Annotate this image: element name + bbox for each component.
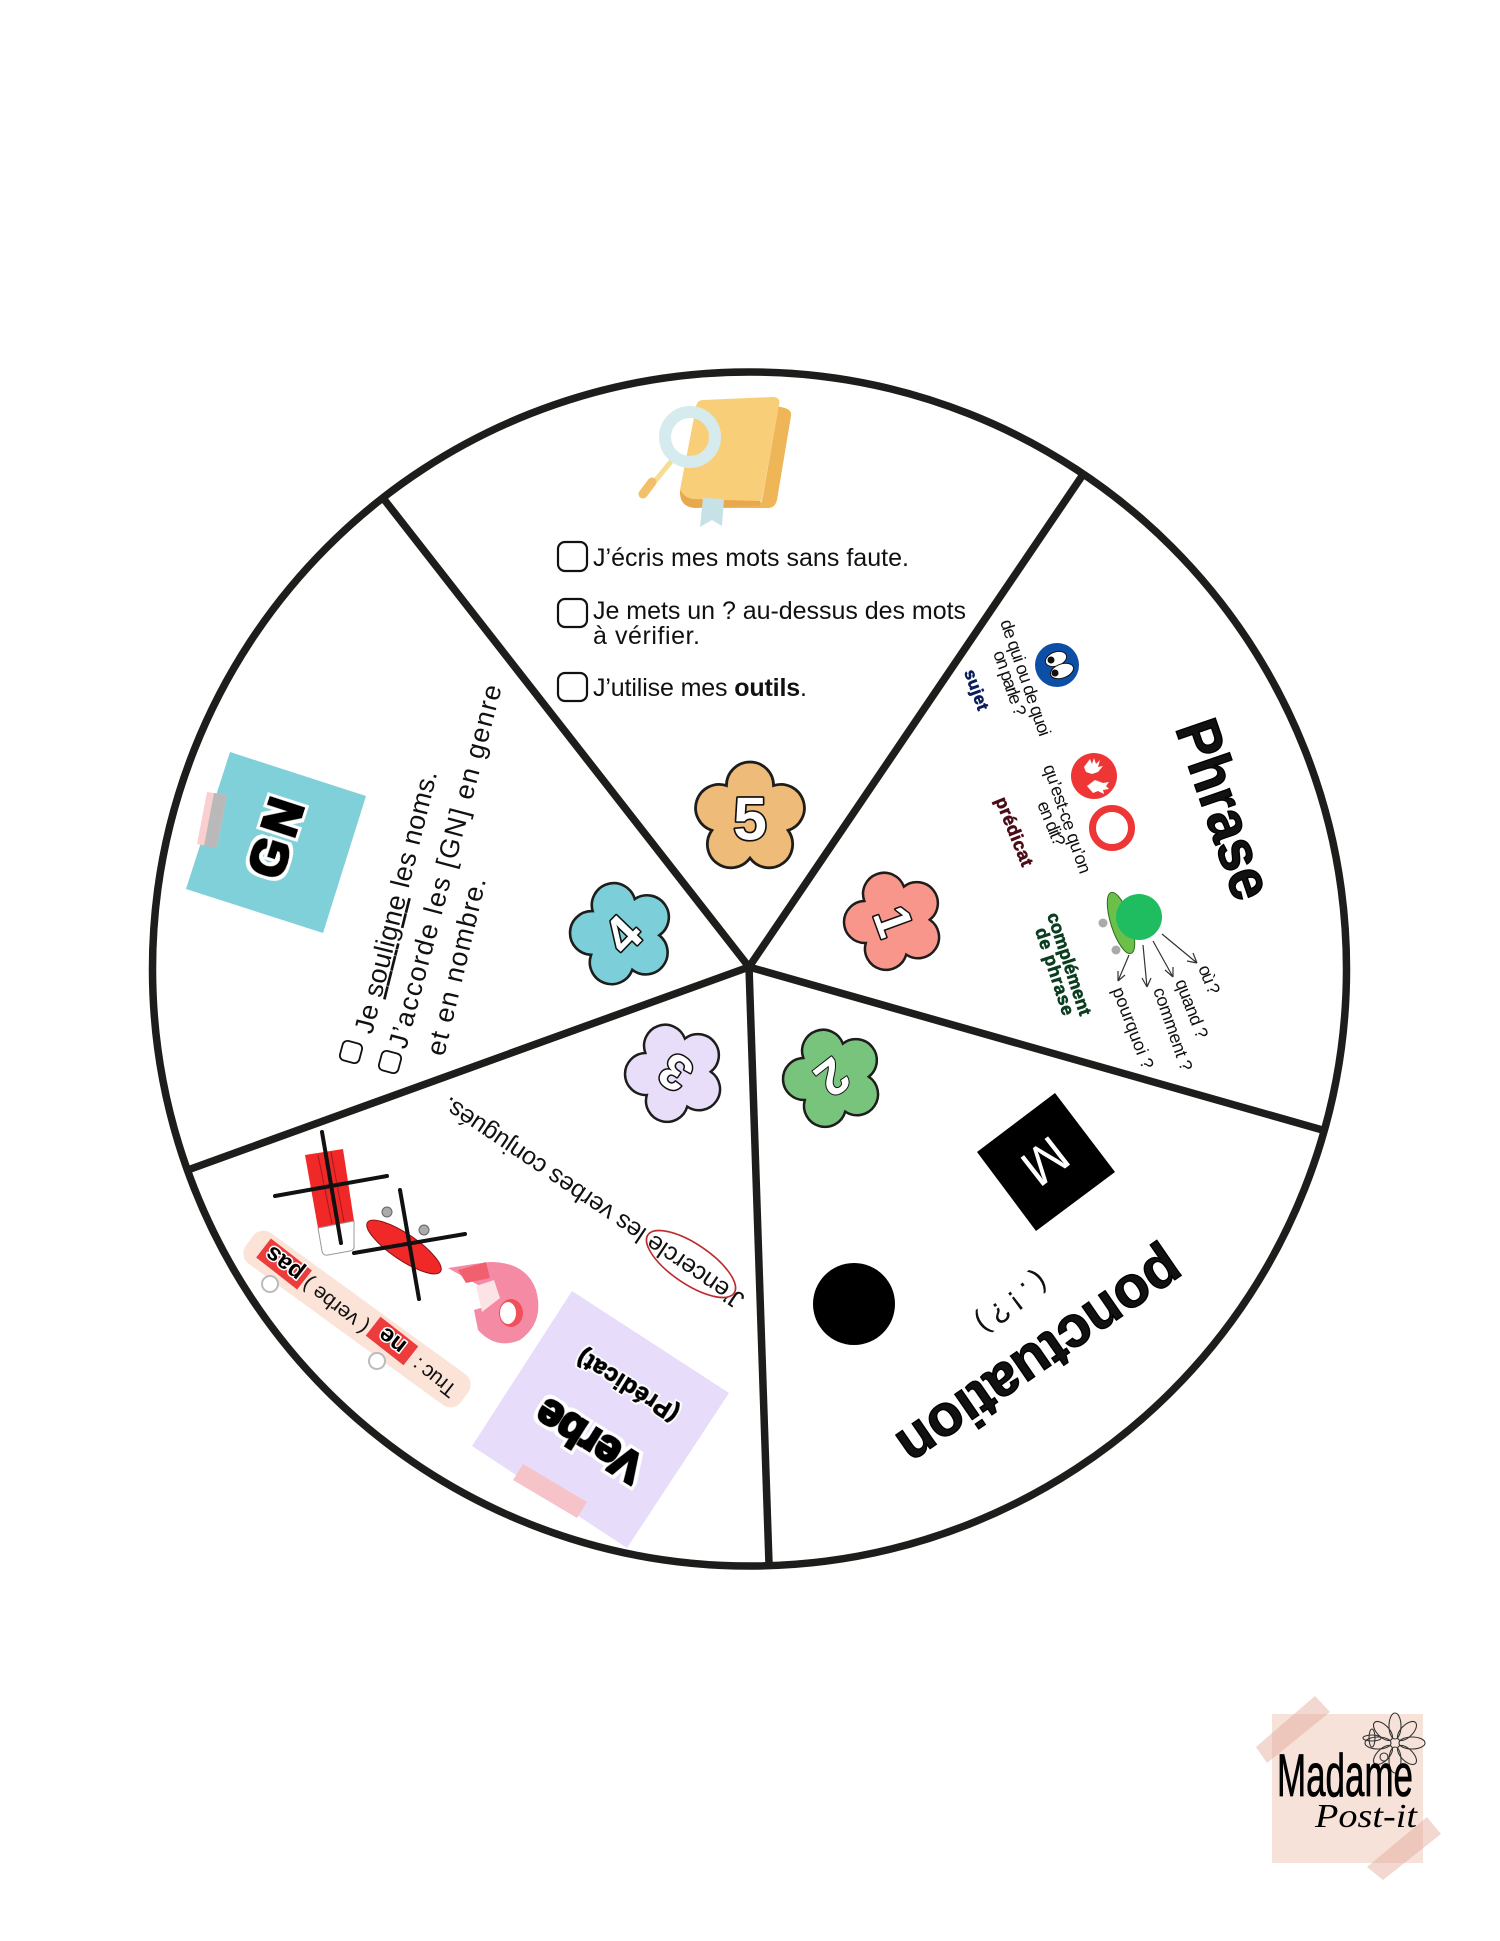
- callout: truc ne verbe pas: [238, 1225, 476, 1413]
- checklist item: souligne: Je souligne les noms.: [349, 767, 443, 1036]
- logo: Madame Post-it: [1256, 1696, 1441, 1880]
- black square with M: [977, 1093, 1115, 1231]
- wheel outline and five spokes: [152, 372, 1346, 1566]
- panel 3: verbe: [238, 1008, 749, 1548]
- panel 5: spelling checklist: [558, 397, 966, 868]
- icon: red ring: [1092, 808, 1132, 848]
- icon: green circle with skateboard: [1098, 889, 1162, 957]
- icon: blue circle with eyes: [1035, 643, 1079, 687]
- question: sujet: on parle ?: [989, 648, 1030, 719]
- checkbox item 2: [558, 597, 966, 650]
- icon: pink tape dispenser: [448, 1262, 538, 1343]
- callout: truc ne verbe pas: pas: [260, 1240, 309, 1287]
- flower number 2: 2: [804, 1047, 861, 1108]
- questions: où, quand, comment, pourquoi: où ?: [1194, 962, 1224, 997]
- panel 1: Phrase: [831, 617, 1287, 1074]
- questions: où, quand, comment, pourquoi: [1108, 962, 1224, 1074]
- logo script: Post-it: [1314, 1798, 1419, 1835]
- checkbox item 2: à vérifier.: [593, 622, 700, 650]
- checkbox item 3: J’utilise mes outils.: [593, 674, 807, 702]
- subheading: prédicat: (Prédicat): [572, 1344, 684, 1428]
- logo flowers: [1363, 1713, 1425, 1773]
- flower number 2: [768, 1009, 902, 1144]
- callout: truc ne verbe pas: ne: [373, 1321, 412, 1360]
- label: prédicat: prédicat: [991, 794, 1037, 869]
- questions: où, quand, comment, pourquoi: quand ?: [1171, 976, 1212, 1041]
- flower number 1: 1: [862, 899, 924, 944]
- heading: ponctuation: ponctuation: [886, 1237, 1197, 1480]
- punctuation marks: ( . ! ? ): [969, 1265, 1054, 1340]
- callout: truc ne verbe pas: ( verbe ): [298, 1273, 373, 1339]
- logo tape strips: [1256, 1696, 1441, 1880]
- teal note with GN: GN: [237, 791, 315, 885]
- flower number 3: [611, 1008, 744, 1141]
- heading: Phrase: Phrase: [1163, 710, 1287, 908]
- icon: crossed-out red skateboard: [354, 1190, 465, 1299]
- purple note: [472, 1291, 729, 1548]
- flower number 4: [559, 870, 683, 992]
- callout: truc ne verbe pas: Truc :: [408, 1353, 461, 1402]
- heading: Verbe: Verbe: [526, 1389, 652, 1493]
- panel 2: ponctuation: [768, 1009, 1197, 1480]
- flower number 5: 5: [733, 784, 767, 852]
- checkbox item 1: J’écris mes mots sans faute.: [593, 544, 909, 572]
- checkbox item 2: Je mets un ? au-dessus des mots: [593, 597, 966, 625]
- instruction: encercle les verbes: J’encercle les verbes conjugués.: [437, 1091, 749, 1314]
- flower number 3: 3: [648, 1041, 703, 1103]
- teal note with GN: [186, 752, 366, 933]
- question: prédicat: qu’est-ce qu’on: [1039, 762, 1095, 876]
- flower number 4: 4: [592, 905, 654, 966]
- red ellipse around encercle: [637, 1218, 745, 1310]
- checklist item: accorde: et en nombre.: [421, 874, 492, 1058]
- icon: crossed-out correction fluid: [275, 1132, 387, 1255]
- flower number 1: [831, 857, 955, 979]
- label: complément de phrase: complément: [1043, 910, 1095, 1018]
- icon: book with magnifying glass: [643, 397, 791, 527]
- questions: où, quand, comment, pourquoi: comment ?: [1149, 985, 1196, 1074]
- questions: où, quand, comment, pourquoi: pourquoi ?: [1108, 984, 1158, 1072]
- question: sujet: de qui ou de quoi: [996, 617, 1055, 739]
- label: complément de phrase: de phrase: [1031, 925, 1078, 1018]
- black square with M: M: [1010, 1124, 1080, 1197]
- flower number 5: [696, 762, 804, 868]
- black dot: [813, 1263, 895, 1345]
- arrows from the green circle: [1118, 934, 1197, 987]
- panel 4: groupe nominal: [186, 681, 683, 1074]
- checklist item: accorde: J’accorde les [GN] en genre: [383, 681, 508, 1052]
- question: prédicat: en dit?: [1033, 798, 1069, 849]
- icon: red circle with hands: [1071, 753, 1132, 848]
- label: sujet: sujet: [960, 667, 993, 713]
